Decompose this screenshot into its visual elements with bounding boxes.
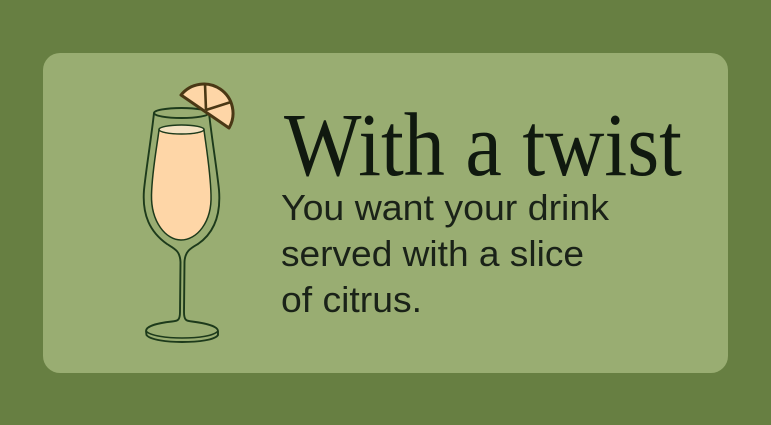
base edge bbox=[146, 331, 218, 338]
drink surface bbox=[159, 125, 204, 134]
title: With a twist bbox=[284, 94, 682, 195]
icon: cocktail glass with citrus bbox=[144, 84, 233, 342]
glass outline bbox=[144, 113, 219, 342]
line 1: You want your drink bbox=[281, 187, 610, 228]
line 2: served with a slice bbox=[281, 233, 584, 274]
panel: card bbox=[43, 53, 728, 373]
drink bbox=[151, 130, 211, 240]
citrus slice bbox=[181, 84, 233, 128]
line 3: of citrus. bbox=[281, 279, 422, 320]
body text bbox=[281, 187, 610, 320]
glass rim bbox=[154, 108, 209, 118]
